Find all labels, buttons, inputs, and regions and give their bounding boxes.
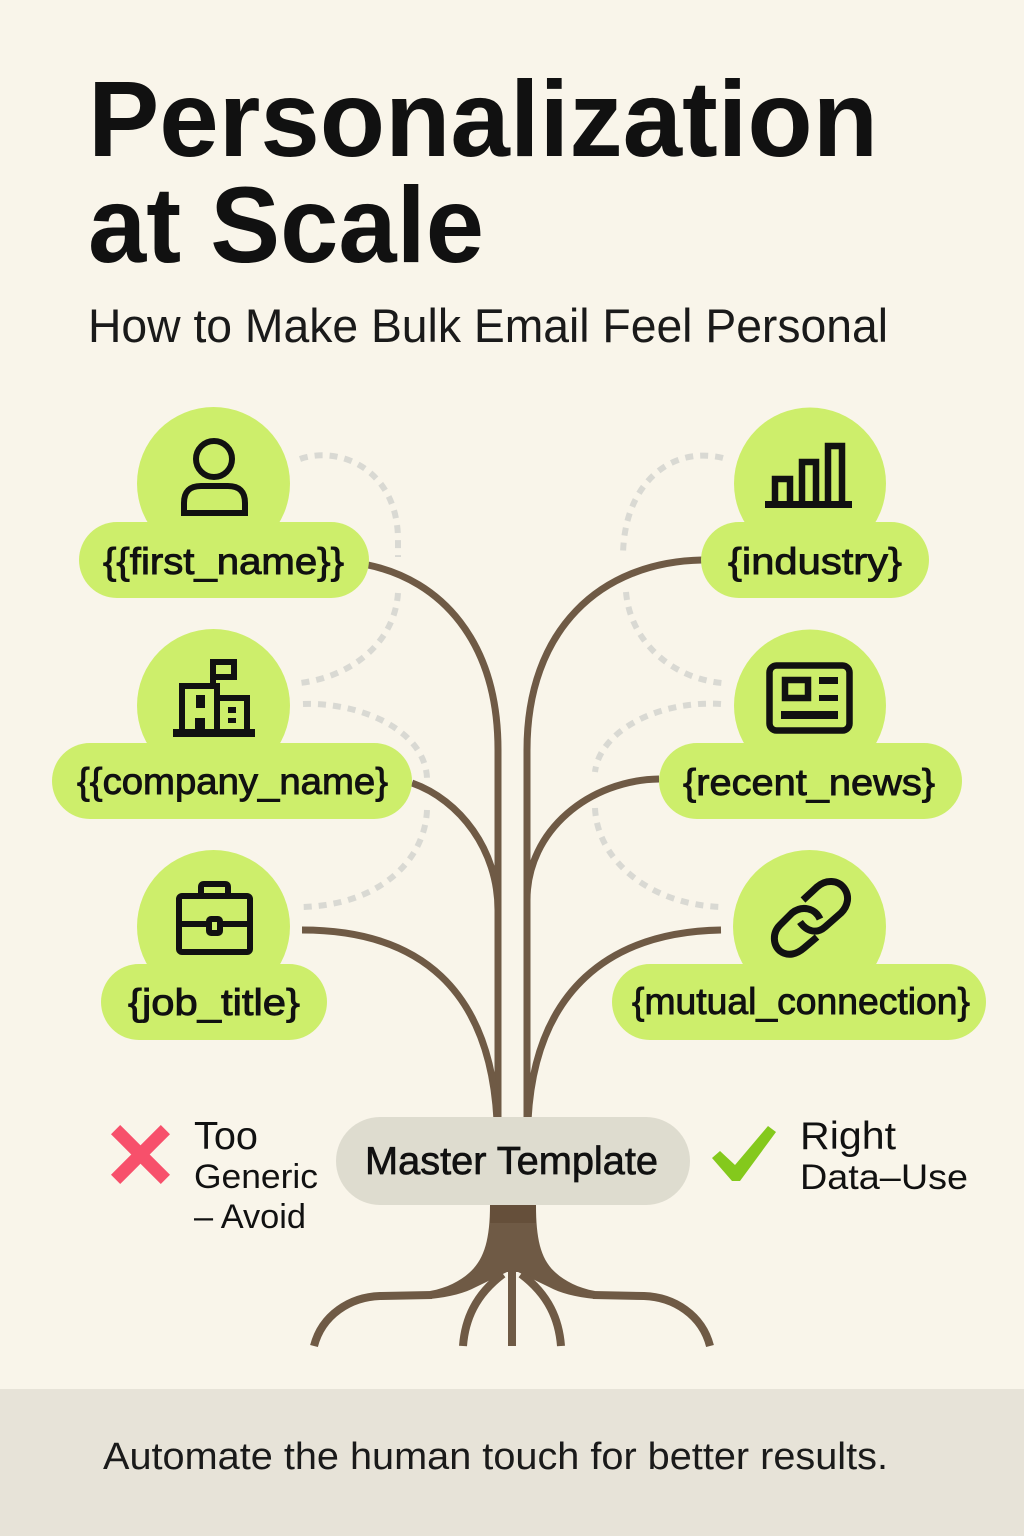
node: company_name <box>52 629 412 819</box>
label: recent_news: {recent_news} <box>683 762 935 803</box>
icon: red cross <box>116 1130 165 1179</box>
subtitle: How to Make Bulk Email Feel Personal <box>88 299 888 352</box>
right data use note <box>800 1115 968 1197</box>
too generic note: Generic <box>194 1158 318 1196</box>
node: industry <box>701 408 929 598</box>
icon: bar chart <box>765 446 852 504</box>
icon: chain link <box>774 881 848 954</box>
too generic note: Too <box>194 1115 258 1158</box>
tree roots <box>314 1205 710 1346</box>
node: mutual_connection <box>612 850 986 1040</box>
node: job_title <box>101 850 327 1040</box>
icon: green check <box>712 1126 776 1181</box>
icon: person <box>184 441 245 513</box>
icon: newspaper <box>770 666 850 730</box>
icon: building with flag <box>173 662 255 733</box>
node: recent_news <box>659 630 962 819</box>
too generic note <box>194 1115 318 1236</box>
label: job_title: {job_title} <box>128 982 300 1023</box>
title <box>88 58 878 285</box>
label: first_name: {{first_name}} <box>103 541 344 582</box>
master template pill: Master Template <box>365 1140 658 1183</box>
label: company_name: {{company_name} <box>77 761 388 802</box>
footer band <box>0 1389 1024 1536</box>
master template pill <box>336 1117 690 1205</box>
title: Personalization <box>88 58 878 179</box>
footer text: Automate the human touch for better results. <box>103 1436 888 1478</box>
title: at Scale <box>88 164 484 285</box>
node: first_name <box>79 407 369 598</box>
right data use note: Right <box>800 1115 896 1158</box>
dashed connectors <box>300 455 723 907</box>
label: industry: {industry} <box>728 541 902 582</box>
right data use note: Data–Use <box>800 1158 968 1197</box>
too generic note: – Avoid <box>194 1198 306 1236</box>
label: mutual_connection: {mutual_connection} <box>632 981 970 1022</box>
icon: briefcase <box>179 884 250 952</box>
tree trunk and branches <box>302 560 721 1120</box>
